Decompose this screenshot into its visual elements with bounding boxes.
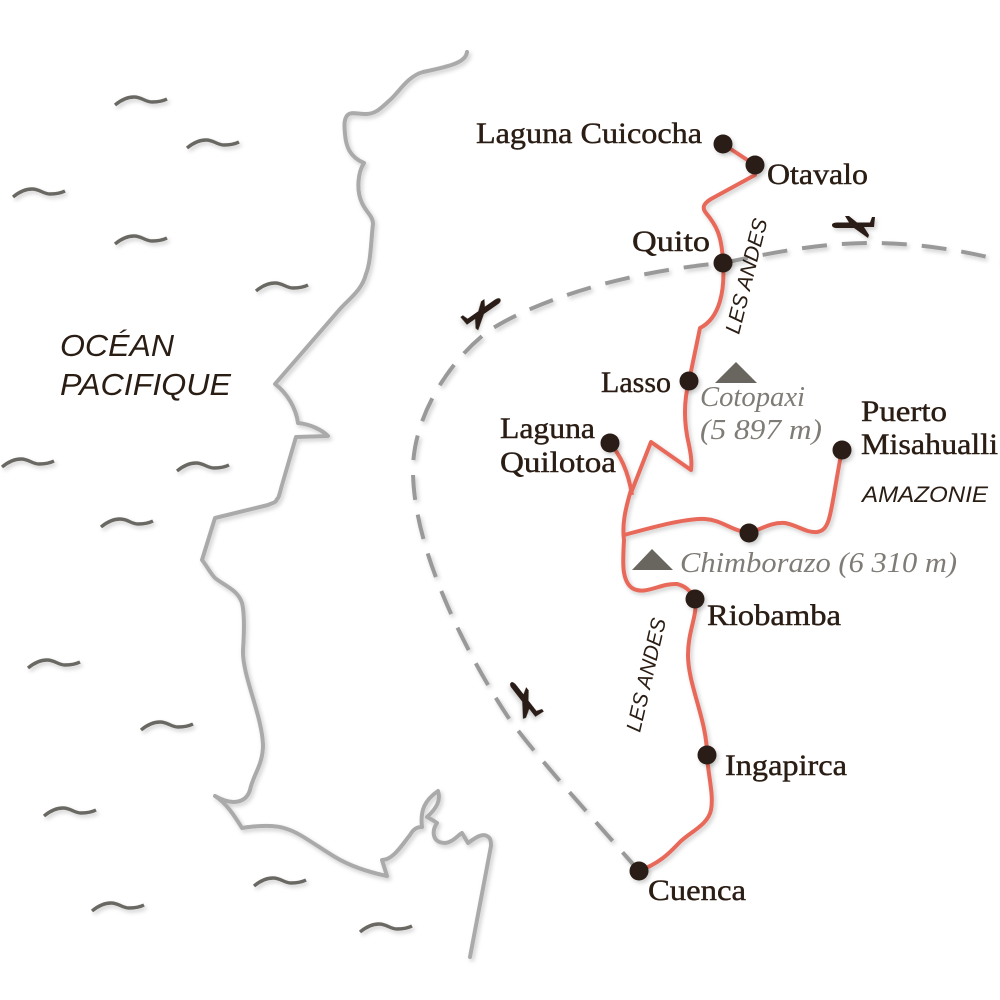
label: Otavalo: Otavalo — [767, 158, 868, 191]
icon: plane south-west route — [501, 677, 545, 724]
label: Océan Pacifique: OCÉAN — [60, 328, 175, 363]
label: Chimborazo altitude: Chimborazo (6 310 m) — [680, 548, 957, 579]
label: Les Andes south: LES ANDES — [622, 616, 671, 734]
coastline and borders — [202, 52, 491, 957]
ocean waves — [2, 97, 412, 932]
icon: plane east — [832, 216, 875, 238]
label: Puerto Misahualli — [861, 395, 998, 461]
label: Amazonie: AMAZONIE — [860, 482, 988, 507]
stop markers — [600, 134, 852, 880]
label: Océan Pacifique — [60, 328, 231, 402]
label: Cotopaxi altitude: Cotopaxi — [700, 382, 805, 413]
label: Cotopaxi altitude — [700, 382, 822, 446]
label: Quito: Quito — [632, 225, 710, 258]
label: Lasso: Lasso — [601, 366, 671, 399]
icon: Cotopaxi mountain — [715, 362, 757, 383]
label: Cotopaxi altitude: (5 897 m) — [700, 415, 822, 446]
label: Cuenca: Cuenca — [648, 874, 746, 907]
label: Puerto Misahualli: Misahualli — [861, 428, 998, 461]
flight path dashed — [413, 243, 1000, 871]
label: Laguna Cuicocha: Laguna Cuicocha — [476, 117, 702, 150]
label: Puerto Misahualli: Puerto — [861, 395, 947, 428]
label: Ingapirca: Ingapirca — [725, 749, 847, 782]
route red — [610, 144, 842, 871]
label: Océan Pacifique: PACIFIQUE — [60, 367, 231, 402]
icon: Chimborazo mountain — [632, 549, 673, 570]
icon: plane north-west route — [460, 292, 508, 334]
label: Laguna Quilotoa: Laguna — [500, 412, 595, 445]
label: Laguna Quilotoa — [500, 412, 616, 479]
label: Les Andes north: LES ANDES — [722, 216, 772, 336]
label: Riobamba: Riobamba — [707, 599, 841, 632]
label: Laguna Quilotoa: Quilotoa — [500, 446, 616, 479]
